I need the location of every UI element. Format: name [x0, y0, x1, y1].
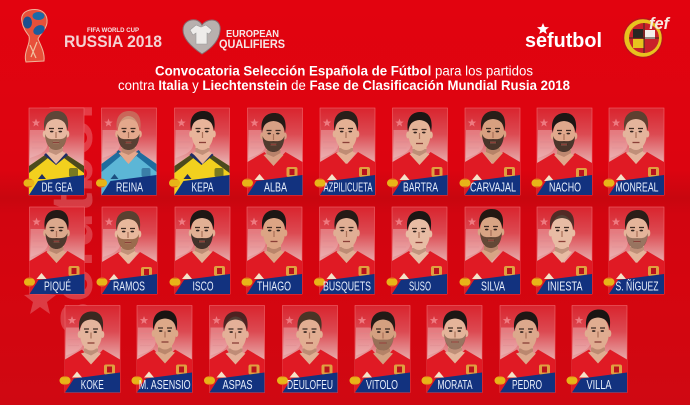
player card: Ramos	[96, 207, 157, 295]
player card: Isco: ISCO	[192, 280, 214, 294]
player card: Iniesta: INIESTA	[548, 280, 583, 294]
player card: Deulofeu	[277, 306, 338, 392]
player card: Nacho	[532, 108, 592, 196]
player card: De Gea: DE GEA	[42, 180, 73, 194]
player card: S. Ñíguez: S. ÑÍGUEZ	[616, 279, 659, 294]
player card: Monreal	[604, 108, 664, 195]
player card: Morata: MORATA	[438, 378, 473, 392]
player card: Villa	[566, 306, 627, 392]
player card: Bartra: BARTRA	[403, 180, 438, 194]
logo: sefutbol: sefutbol	[525, 30, 602, 52]
player card: Bartra	[387, 108, 448, 195]
logo: Russia 2018 wordmark: RUSSIA 2018	[64, 32, 162, 51]
title	[118, 62, 570, 93]
player card: Alba	[242, 108, 302, 195]
player card: Busquets	[314, 207, 374, 294]
player card: Vitolo: VITOLO	[366, 378, 398, 392]
player card: Koke	[60, 306, 120, 392]
player card: Carvajal: CARVAJAL	[470, 180, 516, 194]
player card: Pedro	[494, 306, 555, 392]
player card: Kepa	[169, 108, 230, 195]
player card: Silva	[460, 207, 520, 294]
player card: Reina	[96, 108, 156, 195]
player card: Piqué	[24, 207, 84, 294]
player card: Aspas	[204, 306, 264, 392]
player card: S. Ñíguez	[604, 207, 664, 294]
player card: Deulofeu: DEULOFEU	[287, 378, 333, 392]
player card: Azpilicueta	[314, 108, 375, 195]
player card: Alba: ALBA	[264, 180, 287, 194]
logo: Russia 2018 wordmark: FIFA WORLD CUP	[87, 27, 140, 34]
player card: Pedro: PEDRO	[512, 378, 542, 392]
player card: Carvajal	[460, 108, 520, 195]
player card: Thiago	[242, 207, 302, 294]
logo: European Qualifiers heart	[183, 20, 285, 54]
player card: M. Asensio: M. ASENSIO	[139, 378, 191, 392]
title: contra Italia y Liechtenstein de Fase de Clasificación Mundial Rusia 2018	[118, 77, 570, 93]
player card: Vitolo	[350, 306, 410, 392]
player card: Morata	[422, 306, 482, 392]
watermark: sefutbol vertical: sefutbol	[40, 103, 105, 335]
player card: Reina: REINA	[116, 180, 143, 194]
player card: Ramos: RAMOS	[113, 280, 145, 294]
player card: Nacho: NACHO	[549, 180, 581, 194]
logo: Spanish federation crest	[624, 14, 671, 58]
player card: Suso	[386, 207, 447, 294]
player card: Aspas: ASPAS	[222, 378, 252, 392]
player card: Suso: SUSO	[409, 280, 431, 294]
player card: De Gea	[24, 108, 84, 195]
title: Convocatoria Selección Española de Fútbol para los partidos	[155, 62, 533, 78]
player card: Busquets: BUSQUETS	[323, 280, 371, 294]
player card: Piqué: PIQUÉ	[44, 279, 71, 294]
logo: FIFA World Cup trophy	[22, 10, 47, 62]
logo: European Qualifiers heart: EUROPEAN	[226, 29, 279, 40]
logo: Spanish federation crest: fef	[649, 14, 671, 33]
player card: Koke: KOKE	[81, 378, 104, 392]
player card: Monreal: MONREAL	[616, 180, 659, 194]
player card: Thiago: THIAGO	[257, 280, 291, 294]
player card: Villa: VILLA	[586, 378, 612, 392]
player card: Iniesta	[532, 207, 592, 294]
logo: European Qualifiers heart: QUALIFIERS	[219, 39, 285, 51]
player card: Isco	[170, 207, 230, 294]
player card: Azpilicueta: AZPILICUETA	[324, 180, 373, 194]
player card: M. Asensio	[132, 306, 192, 392]
player card: Silva: SILVA	[481, 280, 505, 294]
player card: Kepa: KEPA	[192, 180, 214, 194]
